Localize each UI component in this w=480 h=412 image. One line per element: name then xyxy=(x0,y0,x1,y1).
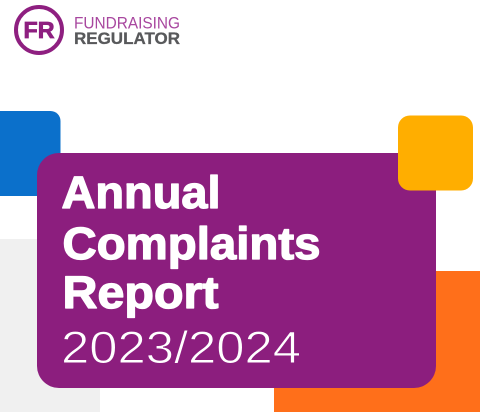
panel: purple title card xyxy=(37,153,436,388)
decorative block: yellow xyxy=(398,116,473,190)
title line: Complaints: Complaints xyxy=(62,218,320,269)
logo text: Regulator: REGULATOR xyxy=(74,29,180,48)
decorative block: blue xyxy=(0,111,60,196)
icon: FR roundel: FR xyxy=(24,17,55,43)
title line: Annual: Annual xyxy=(62,167,220,218)
logo text: Fundraising: FUNDRAISING xyxy=(74,14,180,32)
subtitle: year: 2023/2024 xyxy=(61,322,301,373)
decorative block: orange xyxy=(274,271,480,412)
decorative block: grey xyxy=(0,239,100,412)
title line: Report: Report xyxy=(62,267,219,318)
logo: Fundraising Regulator xyxy=(16,7,180,53)
icon: FR roundel xyxy=(16,7,62,53)
title xyxy=(62,167,320,318)
